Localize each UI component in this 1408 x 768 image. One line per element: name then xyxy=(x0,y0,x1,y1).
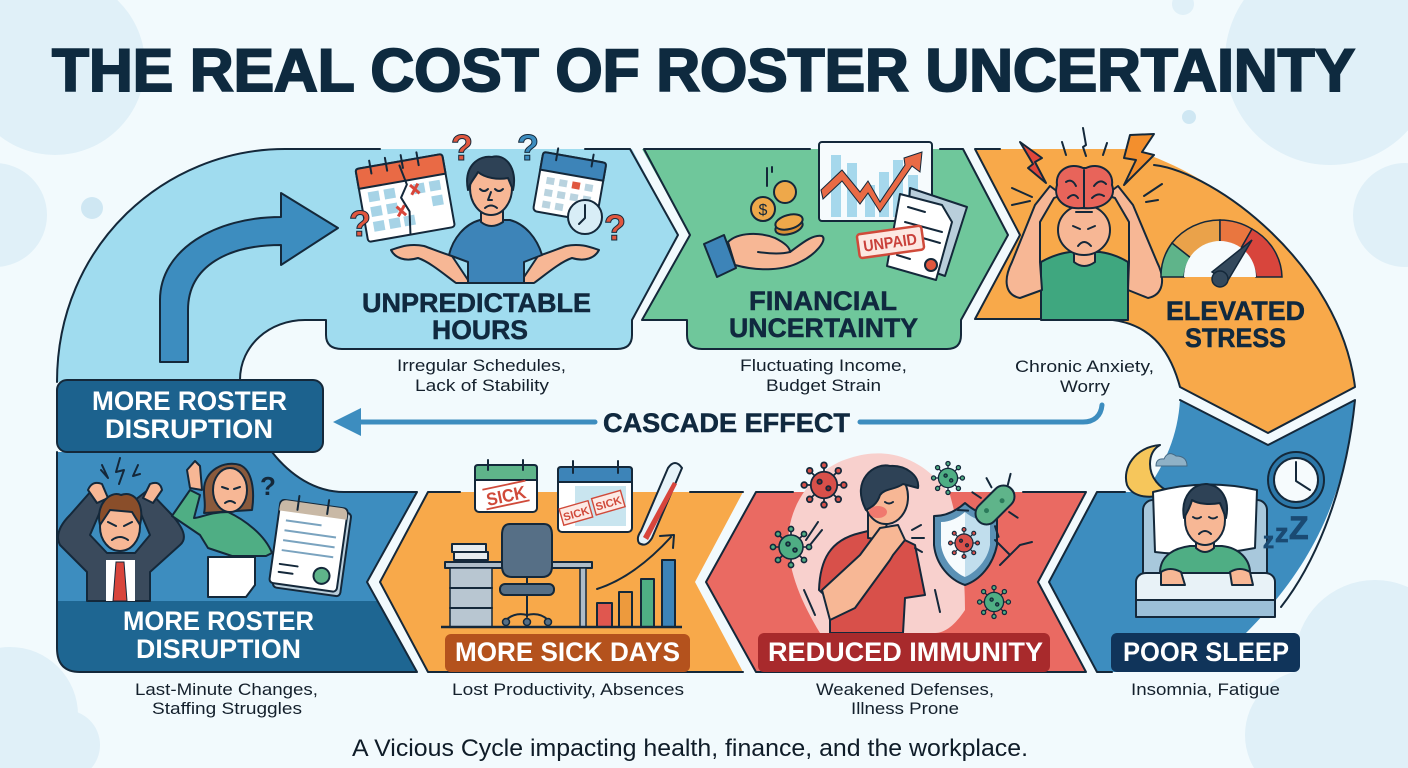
heading xyxy=(729,286,918,343)
icon: question marks: ? xyxy=(349,203,371,244)
label pill: MORE SICK DAYS xyxy=(455,637,680,667)
icon: stressed person xyxy=(1007,166,1162,320)
arrow: cascade effect xyxy=(333,405,1102,438)
captions: Irregular Schedules, xyxy=(397,356,566,375)
icon: question marks xyxy=(349,127,626,248)
halo xyxy=(788,453,965,633)
icon: zzz: z xyxy=(1263,528,1274,553)
captions: Lost Productivity, Absences xyxy=(452,680,684,699)
panel: more roster disruption xyxy=(57,452,417,672)
icon: sick card: SICK xyxy=(485,482,528,510)
heading xyxy=(362,288,591,345)
heading: ELEVATED xyxy=(1166,296,1305,326)
captions: Staffing Struggles xyxy=(152,699,302,718)
icon: sick card xyxy=(475,460,537,512)
icon: coins and hand: $ xyxy=(759,202,768,219)
captions: Chronic Anxiety, xyxy=(1015,357,1154,376)
icon: worried colleague: ? xyxy=(260,471,276,501)
icon: sick calendar: SICK xyxy=(594,495,623,513)
heading: DISRUPTION xyxy=(136,634,301,664)
heading: STRESS xyxy=(1185,323,1286,353)
captions: Weakened Defenses, xyxy=(816,680,994,699)
arrow: cycle restart xyxy=(160,193,338,362)
heading xyxy=(1166,296,1305,353)
heading: UNCERTAINTY xyxy=(729,313,918,343)
chart: stress gauge xyxy=(1161,220,1282,287)
icon: virus particles xyxy=(770,462,1010,618)
heading xyxy=(123,606,314,664)
icon: broken calendar xyxy=(354,148,455,242)
captions xyxy=(135,356,1280,718)
captions: Insomnia, Fatigue xyxy=(1131,680,1280,699)
icon: cracked shield xyxy=(934,464,1036,585)
label pill: REDUCED IMMUNITY xyxy=(768,637,1043,667)
icon: thermometer xyxy=(638,463,682,545)
icon: moon and cloud xyxy=(1126,445,1187,497)
icon: clipboard xyxy=(269,493,353,597)
captions: Budget Strain xyxy=(766,376,881,395)
heading: HOURS xyxy=(432,315,528,345)
icon: unpaid invoice xyxy=(857,188,967,280)
panel: elevated stress xyxy=(975,128,1355,433)
title: THE REAL COST OF ROSTER UNCERTAINTY xyxy=(52,37,1355,104)
captions: Fluctuating Income, xyxy=(740,356,907,375)
icon: coughing person xyxy=(804,465,940,633)
icon: person in bed xyxy=(1136,484,1275,617)
heading: MORE ROSTER xyxy=(123,606,314,636)
label box: more roster disruption: DISRUPTION xyxy=(105,414,273,444)
icon: sick calendar xyxy=(558,461,632,532)
panel: financial uncertainty xyxy=(642,142,1008,349)
chart: rising line xyxy=(819,142,932,221)
panel: unpredictable hours xyxy=(57,127,678,382)
heading: FINANCIAL xyxy=(749,286,897,316)
icon: zzz: z xyxy=(1275,518,1288,548)
captions: Worry xyxy=(1060,377,1111,396)
captions: Illness Prone xyxy=(851,699,959,718)
icon: worried colleague xyxy=(172,461,276,597)
label box: more roster disruption: MORE ROSTER xyxy=(92,386,287,416)
icon: zzz xyxy=(1263,510,1309,553)
heading: UNPREDICTABLE xyxy=(362,288,591,318)
captions: Last-Minute Changes, xyxy=(135,680,318,699)
chart: rising absences xyxy=(441,535,682,627)
icon: wall clock xyxy=(1268,452,1324,508)
icon: coins and hand xyxy=(704,167,823,277)
icon: question marks: ? xyxy=(604,207,626,248)
footer tagline: A Vicious Cycle impacting health, finance, and the workplace. xyxy=(352,735,1028,762)
label box: more roster disruption xyxy=(57,380,323,452)
label pill: POOR SLEEP xyxy=(1123,637,1289,667)
icon: zzz: Z xyxy=(1289,510,1309,546)
icon: question marks: ? xyxy=(517,127,539,168)
icon: calendar and clock xyxy=(533,146,607,222)
icon: desk and chair xyxy=(445,524,592,627)
icon: frustrated manager xyxy=(58,458,184,601)
icon: lightning bolts xyxy=(1012,128,1162,205)
panel: reduced immunity xyxy=(706,453,1086,672)
icon: shrugging person xyxy=(391,156,599,283)
icon: sick calendar: SICK xyxy=(562,505,591,524)
icon: question marks: ? xyxy=(451,127,473,168)
panel: more sick days xyxy=(380,460,743,672)
cascade label: CASCADE EFFECT xyxy=(603,408,850,438)
captions: Lack of Stability xyxy=(415,376,550,395)
panel: poor sleep xyxy=(1049,400,1355,672)
icon: unpaid invoice: UNPAID xyxy=(862,231,918,256)
